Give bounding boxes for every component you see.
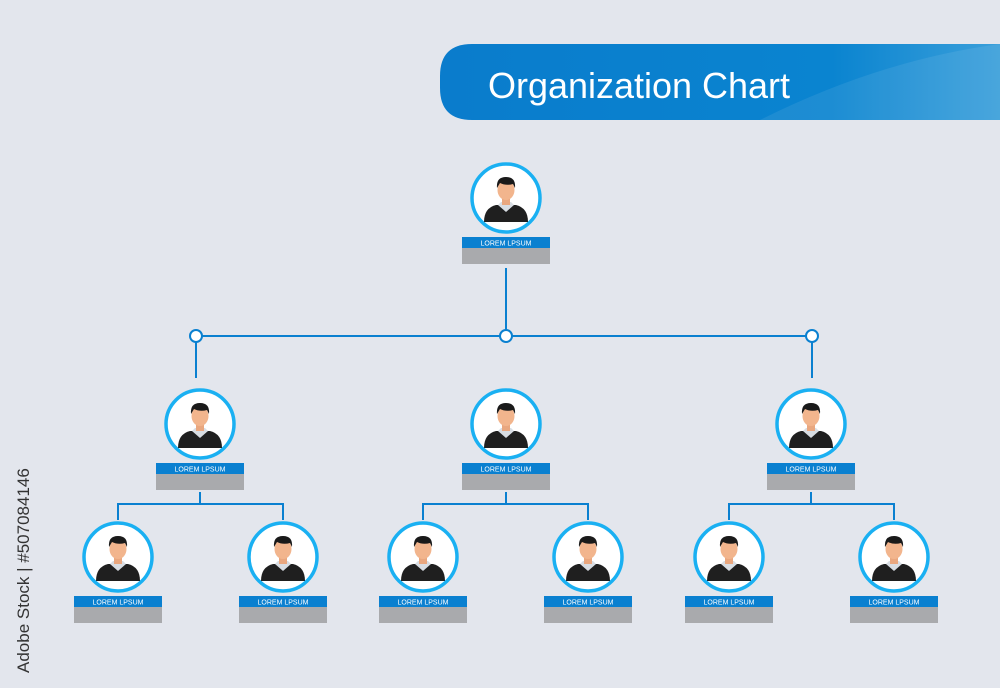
- node: level 3 4: [544, 523, 632, 623]
- title banner: Organization Chart: [488, 65, 790, 106]
- node: level 2 right: [767, 390, 855, 490]
- node: level 3 6: [850, 523, 938, 623]
- node: level 2 left: [156, 390, 244, 490]
- node: level 3 2: [239, 523, 327, 623]
- node: level 3 5: [685, 523, 773, 623]
- node: level 2 center: [462, 390, 550, 490]
- connectors: [118, 268, 894, 520]
- node: level 3 1: [74, 523, 162, 623]
- side caption: Adobe Stock | #507084146: [14, 468, 33, 673]
- node: top: [462, 164, 550, 264]
- node: level 3 3: [379, 523, 467, 623]
- title banner: [440, 44, 1000, 120]
